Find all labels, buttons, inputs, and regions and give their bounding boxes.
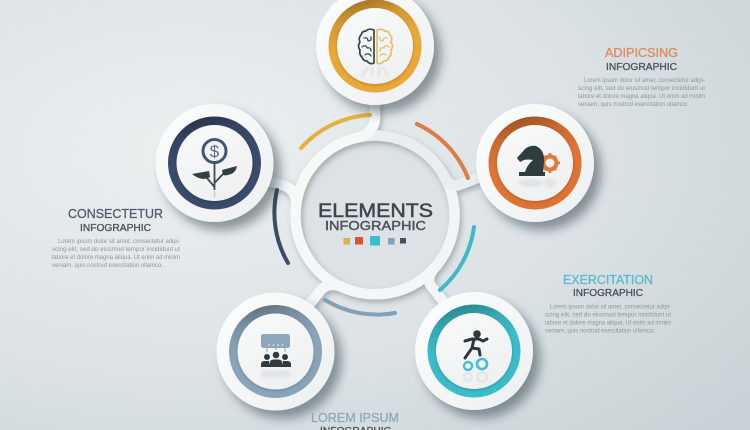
icon: knight and gear bbox=[517, 146, 560, 188]
icon: brain bbox=[358, 29, 392, 76]
circle: bottom right runner bbox=[415, 292, 533, 410]
text block: consectetur bbox=[52, 206, 180, 269]
text block: consectetur: INFOGRAPHIC bbox=[80, 223, 151, 234]
text block: exercitation: veniam, quis nostrud exercitation ullamco. bbox=[545, 328, 655, 334]
text block: adipicsing: INFOGRAPHIC bbox=[606, 62, 677, 73]
text block: adipicsing bbox=[578, 45, 705, 108]
circle: right knight bbox=[476, 104, 594, 222]
text block: exercitation: Lorem ipsum dolor sit amet, consectetur adipi- bbox=[550, 304, 671, 310]
text block: adipicsing: Lorem ipsum dolor sit amet, consectetur adipi- bbox=[584, 77, 705, 84]
text block: adipicsing: labore et dolore magna aliqua. Ut enim ad minim bbox=[578, 93, 705, 100]
center disc bbox=[299, 139, 451, 291]
circle: bottom left people bbox=[216, 292, 334, 410]
connector ring bbox=[268, 100, 480, 310]
center title: ELEMENTS bbox=[318, 200, 433, 222]
text block: exercitation: INFOGRAPHIC bbox=[573, 288, 643, 299]
text block: consectetur: scing elit, sed do eiusmod tempor incididunt ut bbox=[52, 246, 180, 253]
text block: exercitation: scing elit, sed do eiusmod tempor incididunt ut bbox=[545, 312, 671, 318]
center title: INFOGRAPHIC bbox=[325, 218, 426, 233]
text block: adipicsing: ADIPICSING bbox=[605, 45, 678, 60]
text block: consectetur: labore et dolore magna aliqua. Ut enim ad minim bbox=[52, 254, 180, 261]
text block: adipicsing: veniam, quis nostrud exercitation ullamco. bbox=[578, 101, 689, 108]
colored arcs bbox=[274, 115, 474, 315]
text block: adipicsing: scing elit, sed do eiusmod tempor incididunt ut bbox=[578, 85, 705, 92]
color squares bbox=[344, 236, 406, 246]
icon: runner on gears bbox=[464, 330, 487, 382]
text block: exercitation: EXERCITATION bbox=[563, 272, 653, 287]
center title bbox=[318, 200, 433, 233]
text block: consectetur: CONSECTETUR bbox=[68, 206, 163, 221]
icon: people with speech bubble bbox=[261, 334, 291, 378]
text block: consectetur: Lorem ipsum dolor sit amet, consectetur adipi- bbox=[58, 238, 180, 245]
icon: money plant: $ bbox=[210, 142, 220, 161]
text block: exercitation bbox=[545, 272, 671, 334]
circle: top brain bbox=[316, 0, 434, 105]
text block: consectetur: veniam, quis nostrud exercitation ullamco. bbox=[52, 262, 163, 269]
circle: left plant bbox=[156, 104, 274, 222]
text block: exercitation: labore et dolore magna aliqua. Ut enim ad minim bbox=[545, 320, 671, 326]
text block: lorem ipsum: LOREM IPSUM bbox=[311, 410, 399, 425]
